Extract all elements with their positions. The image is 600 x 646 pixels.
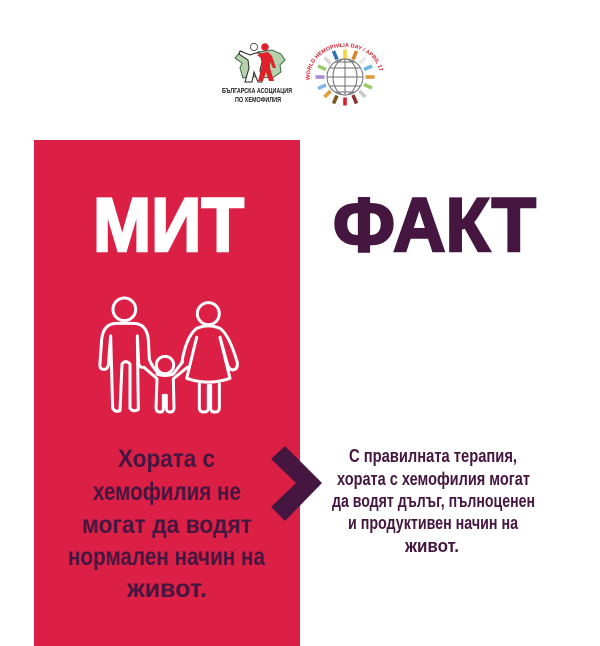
icon: green map with two figures: [235, 43, 285, 82]
text block: myth statement: живот.: [126, 575, 207, 603]
text block: fact statement: и продуктивен начин на: [348, 512, 519, 533]
icon: family of three holding hands: [100, 298, 237, 412]
logo: Bulgarian Hemophilia Association: [222, 43, 292, 104]
text block: myth statement: [68, 445, 266, 603]
arrow: chevron from myth to fact: [271, 446, 322, 521]
text block: myth statement: хемофилия не: [93, 478, 241, 506]
heading: myth: МИТ: [93, 183, 244, 268]
icon: globe: [327, 59, 363, 95]
ring of coloured figures: [316, 50, 374, 106]
heading: fact: ФАКТ: [333, 183, 536, 268]
logo text: [222, 86, 292, 104]
logo: World Hemophilia Day: [306, 43, 384, 106]
text block: myth statement: Хората с: [118, 445, 215, 473]
text block: fact statement: да водят дълъг, пълноценен: [332, 490, 535, 511]
logo text: ПО ХЕМОФИЛИЯ: [235, 95, 281, 104]
panel: myth: [34, 140, 300, 646]
text block: fact statement: хората с хемофилия могат: [337, 468, 530, 489]
arc text: WORLD HEMOPHILIA DAY / APRIL 17: [306, 43, 384, 80]
text block: myth statement: нормален начин на: [68, 543, 266, 571]
text block: fact statement: живот.: [404, 535, 459, 556]
text block: myth statement: могат да водят: [82, 511, 252, 539]
text block: fact statement: [332, 445, 535, 556]
logo text: БЪЛГАРСКА АСОЦИАЦИЯ: [222, 86, 292, 95]
text block: fact statement: С правилната терапия,: [349, 445, 517, 466]
